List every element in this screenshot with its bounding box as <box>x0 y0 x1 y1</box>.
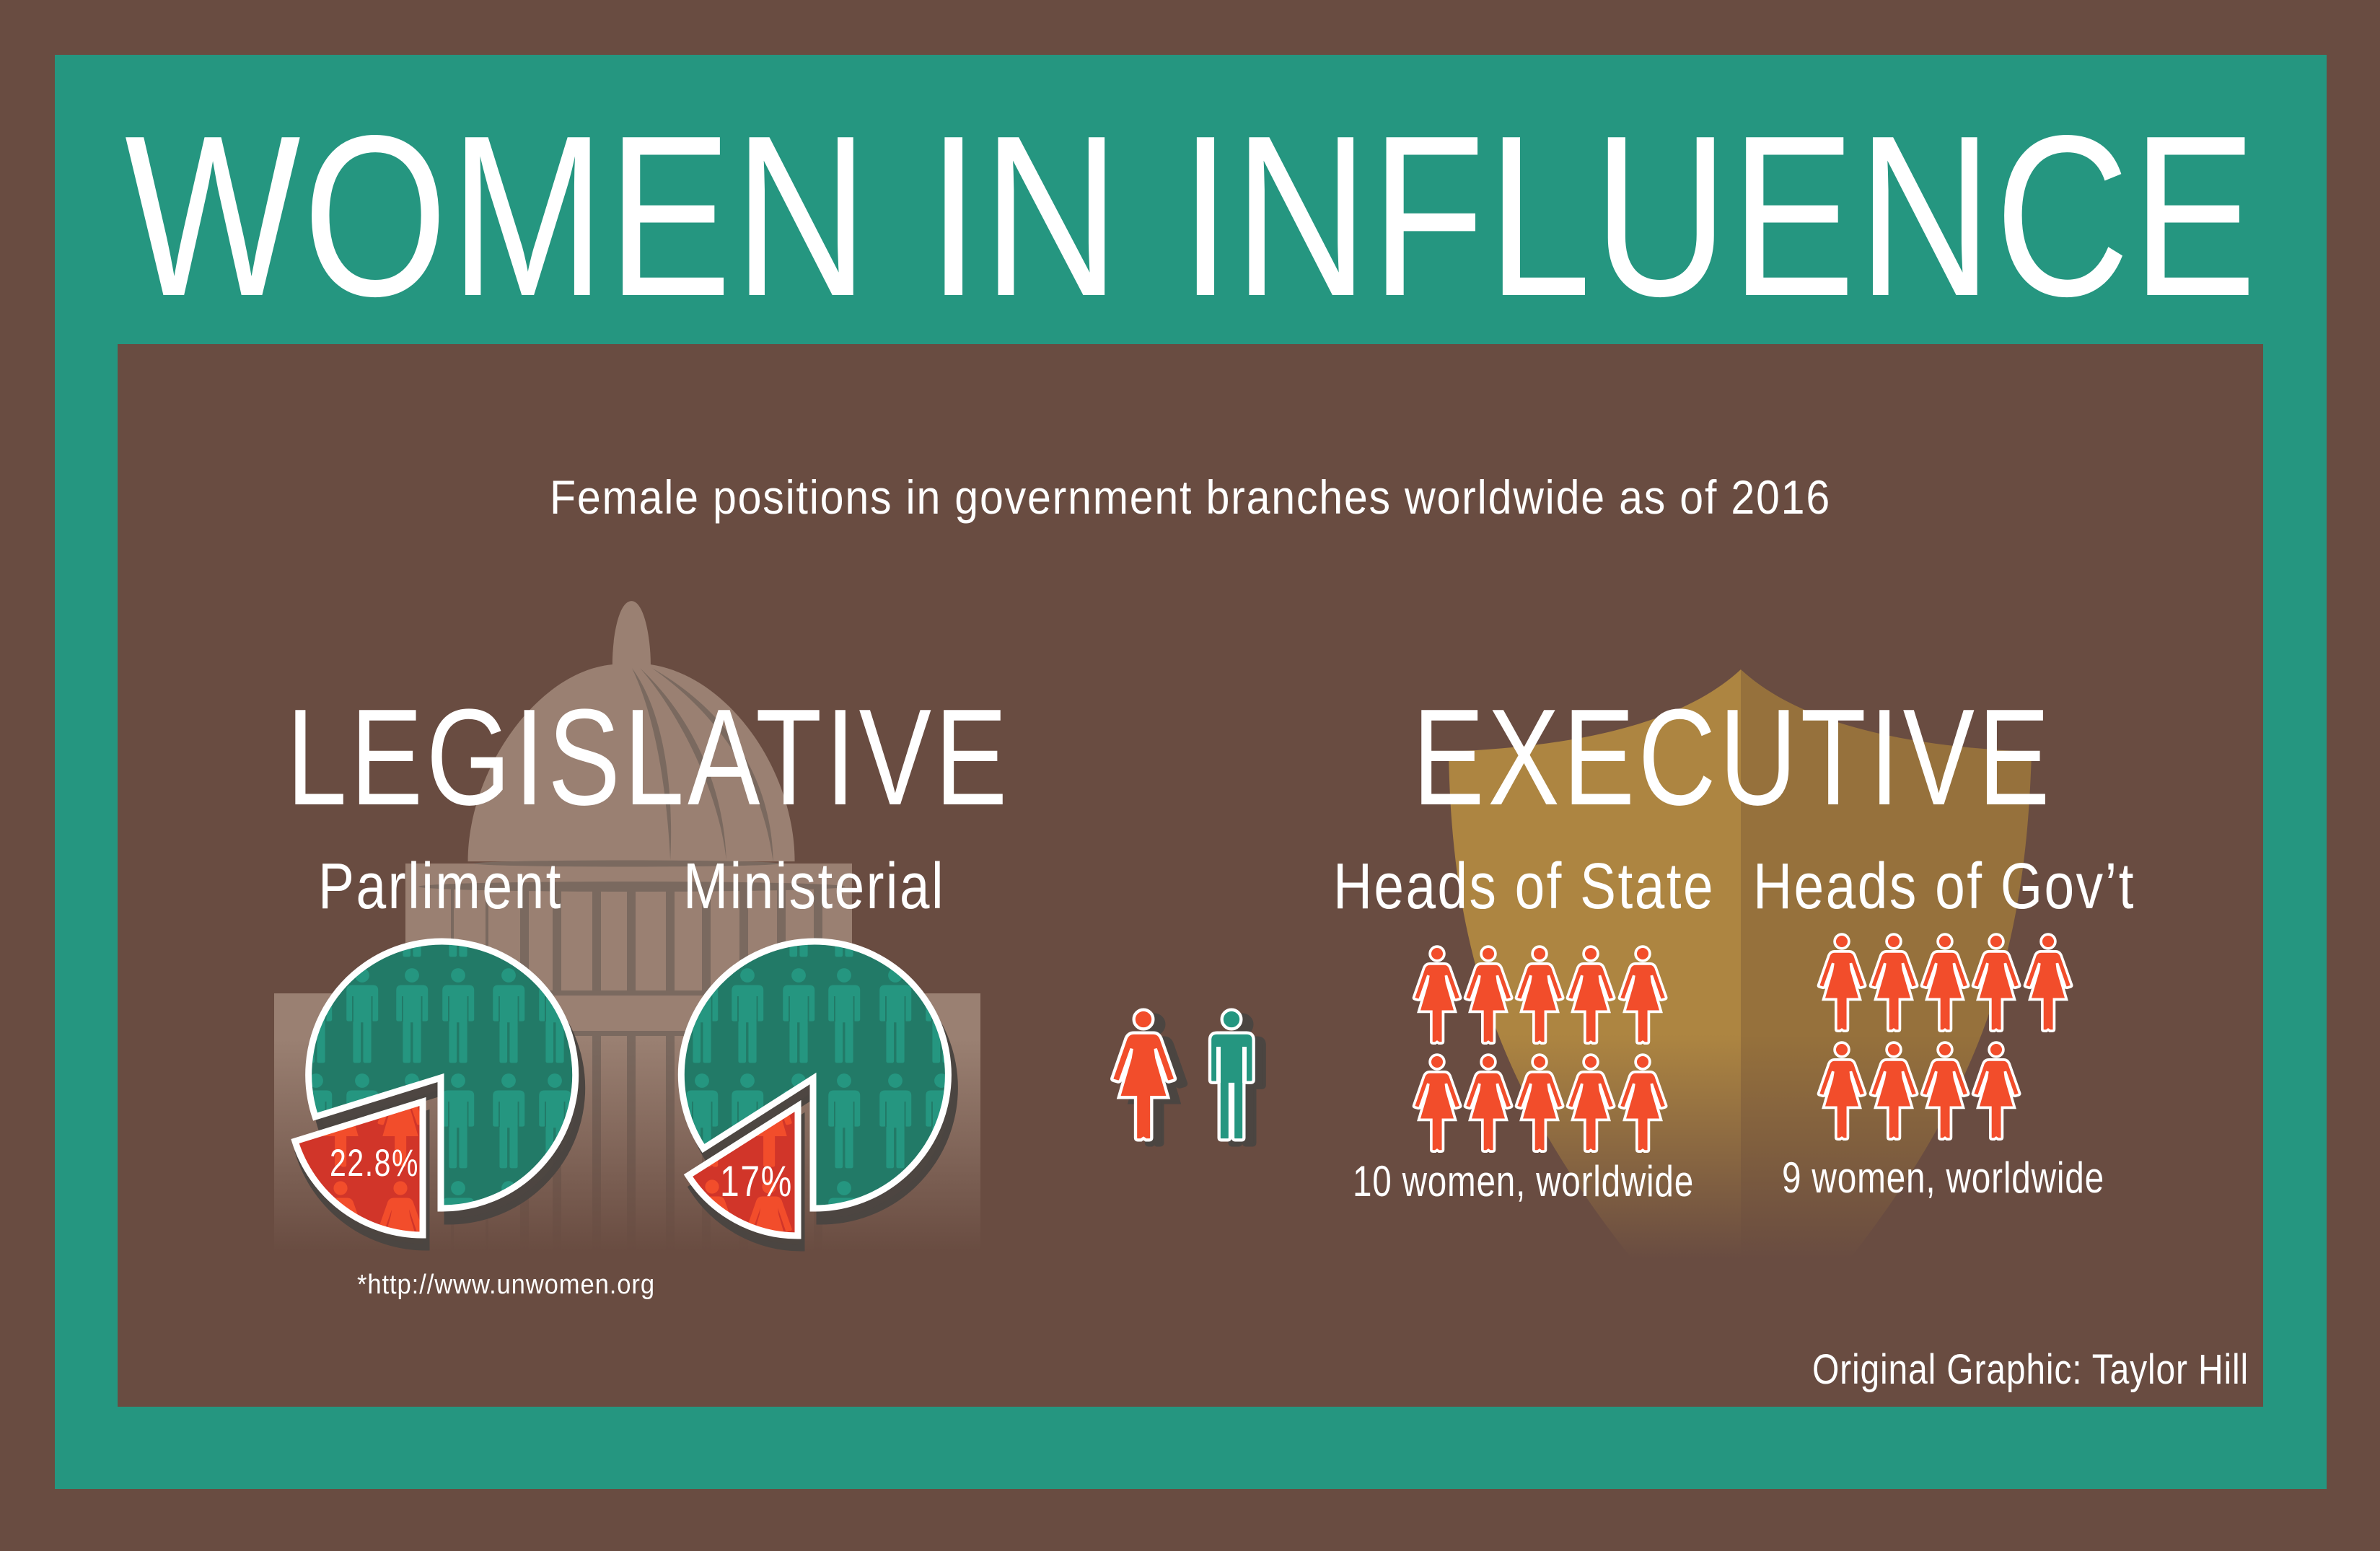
icon array: heads of state, 10 women <box>1414 946 1667 1151</box>
wedge shadow <box>692 1118 802 1248</box>
wedge shadow <box>299 1114 426 1247</box>
title <box>125 88 2259 344</box>
value: 17%: 17% <box>720 1157 793 1205</box>
icon: woman legend <box>1112 1010 1186 1145</box>
source note: *http://www.unwomen.org <box>357 1270 655 1300</box>
label: heads of government: Heads of Gov’t <box>1753 851 2135 923</box>
capitol building illustration <box>274 601 980 1250</box>
value: 22.8%: 22.8% <box>330 1142 419 1185</box>
heading: executive: EXECUTIVE <box>1413 681 2053 834</box>
title: IN <box>927 88 1123 344</box>
pie chart: ministerial 17% <box>678 938 958 1251</box>
label: heads of state: Heads of State <box>1333 851 1715 923</box>
red slice with women pattern <box>684 1100 801 1239</box>
label: parliament: Parliment <box>318 851 563 923</box>
pie chart: parliament 22.8% <box>291 938 586 1251</box>
caption: 9 women: 9 women, worldwide <box>1782 1154 2104 1202</box>
inner brown panel <box>118 344 2263 1407</box>
subtitle: Female positions in government branches worldwide as of 2016 <box>550 470 1831 524</box>
icon array: heads of government, 9 women <box>1819 934 2072 1139</box>
title: WOMEN <box>125 88 871 344</box>
caption: 10 women: 10 women, worldwide <box>1353 1157 1694 1205</box>
credit: Original Graphic: Taylor Hill <box>1812 1346 2249 1393</box>
shield illustration <box>1449 669 2032 1259</box>
red slice with women pattern <box>291 1097 426 1238</box>
heading: legislative: LEGISLATIVE <box>286 681 1011 834</box>
icon: man legend <box>1210 1010 1265 1145</box>
teal slice with men pattern <box>305 938 579 1212</box>
pie shadow <box>688 954 954 1221</box>
label: ministerial: Ministerial <box>683 851 945 923</box>
pie shadow <box>315 954 582 1221</box>
teal slice with men pattern <box>678 938 952 1212</box>
